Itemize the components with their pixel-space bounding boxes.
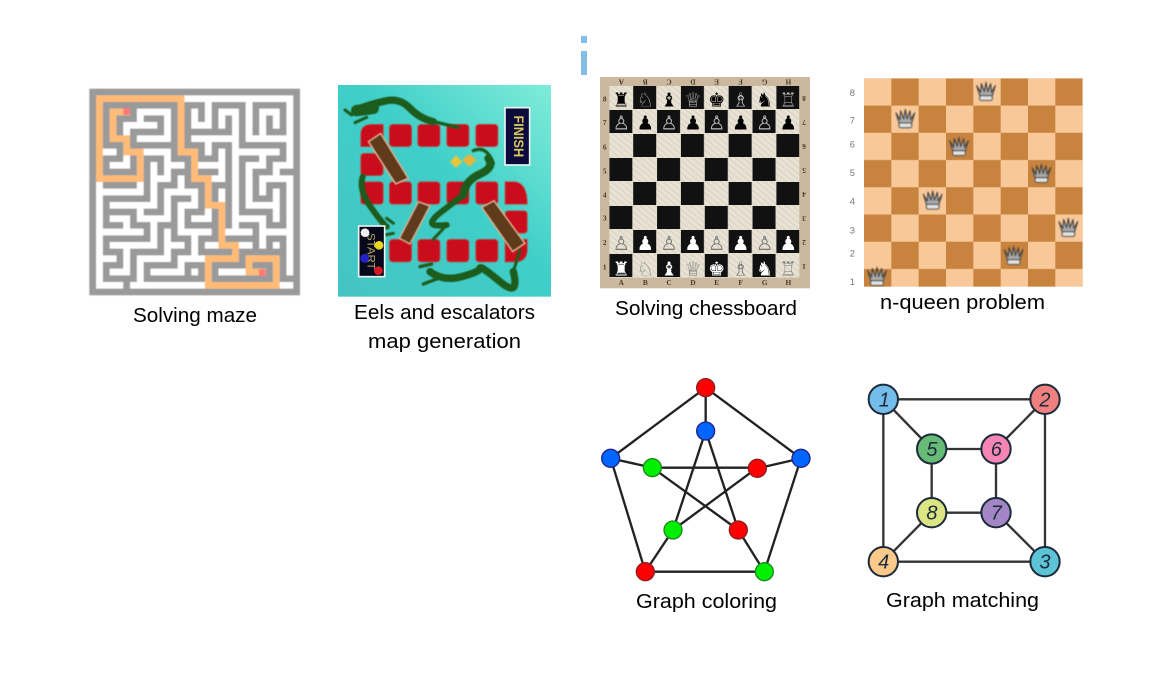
- file and rank labels: A: [618, 77, 624, 86]
- rank numbers: 6: [850, 139, 855, 149]
- file and rank labels: 7: [802, 118, 806, 127]
- eels: [345, 100, 520, 288]
- node numbers: 8: [926, 503, 938, 525]
- chess pieces: ♙: [756, 232, 773, 255]
- rank numbers: [850, 88, 855, 287]
- dice: [450, 154, 477, 168]
- chess pieces: ♝: [660, 88, 678, 111]
- file and rank labels: H: [785, 77, 791, 86]
- chess pieces: ♞: [756, 88, 773, 111]
- rank numbers: 5: [850, 168, 855, 178]
- file and rank labels: F: [738, 77, 743, 86]
- file and rank labels: 8: [802, 94, 806, 103]
- file and rank labels: 2: [603, 238, 607, 247]
- start box: [359, 226, 385, 277]
- node numbers: 1: [879, 389, 890, 411]
- file and rank labels: F: [738, 278, 743, 287]
- chess pieces: ♚: [708, 88, 725, 111]
- file and rank labels: 1: [603, 262, 607, 271]
- chess pieces: ♖: [780, 257, 797, 280]
- file and rank labels: 3: [802, 214, 806, 223]
- chess pieces: ♙: [756, 111, 773, 134]
- chess pieces: ♝: [660, 257, 678, 280]
- caption: Solving maze: [133, 305, 257, 327]
- panel: eels and escalators: [338, 85, 551, 353]
- chess pieces: [613, 88, 797, 280]
- escalators: [368, 133, 525, 252]
- chess pieces: ♟: [684, 232, 702, 255]
- maze walls: [93, 92, 297, 292]
- file and rank labels: 8: [603, 95, 607, 104]
- chess pieces: ♙: [613, 111, 630, 134]
- panel: graph matching: [869, 385, 1060, 612]
- rank numbers: 4: [850, 196, 855, 206]
- caption: Graph matching: [886, 590, 1039, 612]
- file and rank labels: B: [643, 278, 648, 287]
- node numbers: 7: [991, 503, 1003, 525]
- caption: Eels and escalators: [354, 302, 535, 324]
- file and rank labels: 6: [802, 142, 806, 151]
- chess pieces: ♙: [708, 111, 725, 134]
- caption: n-queen problem: [880, 292, 1045, 314]
- finish box: FINISH: [511, 115, 527, 157]
- chess board: [600, 77, 810, 288]
- file and rank labels: 4: [603, 190, 607, 199]
- chess pieces: ♞: [756, 257, 773, 280]
- file and rank labels: C: [666, 278, 672, 287]
- file and rank labels: G: [762, 278, 768, 287]
- chess pieces: ♕: [684, 257, 702, 280]
- rank numbers: 3: [850, 225, 855, 235]
- chess pieces: ♙: [660, 232, 678, 255]
- edges: [883, 399, 1045, 562]
- file and rank labels: C: [666, 77, 672, 86]
- rank numbers: 7: [850, 115, 855, 125]
- file and rank labels: G: [762, 77, 768, 86]
- node numbers: 5: [926, 439, 938, 461]
- icon: blue i mark: [581, 36, 587, 75]
- chess pieces: ♕: [684, 88, 702, 111]
- panel: solving chessboard: [600, 77, 810, 320]
- start marker: [123, 108, 130, 115]
- chess pieces: ♚: [708, 257, 725, 280]
- chess pieces: ♙: [613, 232, 630, 255]
- file and rank labels: D: [690, 77, 696, 86]
- panel: graph coloring: [602, 379, 810, 613]
- caption line 2: map generation: [368, 331, 521, 353]
- start box: START: [364, 233, 376, 270]
- board image: [338, 85, 551, 297]
- chess pieces: ♜: [613, 257, 630, 280]
- node numbers: 4: [878, 552, 889, 574]
- file and rank labels: 7: [603, 118, 607, 127]
- file and rank labels: 5: [802, 166, 806, 175]
- nodes: [602, 379, 810, 581]
- chess pieces: ♙: [708, 232, 725, 255]
- rank numbers: 1: [850, 277, 855, 287]
- file and rank labels: E: [714, 77, 719, 86]
- chess pieces: ♟: [780, 232, 797, 255]
- chess pieces: ♟: [637, 232, 654, 255]
- chess pieces: ♖: [780, 88, 797, 111]
- file and rank labels: D: [690, 278, 696, 287]
- nodes: [869, 385, 1060, 576]
- rank numbers: 2: [850, 249, 855, 259]
- file and rank labels: H: [785, 278, 791, 287]
- chess pieces: ♟: [637, 111, 654, 134]
- file and rank labels: A: [619, 278, 625, 287]
- node numbers: 6: [991, 439, 1003, 461]
- file and rank labels: [603, 77, 806, 287]
- file and rank labels: 3: [603, 214, 607, 223]
- rank numbers: 8: [850, 88, 855, 98]
- chess pieces: ♘: [637, 257, 654, 280]
- queen board: [850, 78, 1083, 287]
- solution path: [99, 99, 276, 285]
- node numbers: 2: [1038, 389, 1051, 411]
- finish box: [505, 108, 530, 165]
- red tiles: [361, 124, 527, 262]
- petersen graph: [602, 379, 810, 581]
- panel: solving maze: [87, 87, 302, 327]
- chess pieces: ♟: [732, 232, 749, 255]
- chess pieces: ♗: [732, 88, 749, 111]
- node numbers: [878, 389, 1051, 574]
- panel: n-queen problem: [850, 78, 1083, 314]
- file and rank labels: B: [643, 77, 648, 86]
- file and rank labels: 6: [603, 142, 607, 151]
- chess pieces: ♘: [637, 88, 654, 111]
- chess pieces: ♟: [780, 111, 797, 134]
- file and rank labels: 5: [603, 166, 607, 175]
- chess pieces: ♜: [613, 88, 630, 111]
- chess pieces: ♟: [732, 111, 749, 134]
- file and rank labels: 1: [802, 262, 806, 271]
- chess pieces: ♙: [660, 111, 678, 134]
- caption: Graph coloring: [636, 591, 777, 613]
- file and rank labels: E: [714, 278, 719, 287]
- caption: Solving chessboard: [615, 298, 797, 320]
- node numbers: 3: [1039, 552, 1051, 574]
- end marker: [259, 269, 266, 276]
- edges: [611, 388, 801, 572]
- chess pieces: ♗: [732, 257, 749, 280]
- file and rank labels: 4: [802, 190, 806, 199]
- cube graph: [869, 385, 1060, 576]
- queens: [868, 82, 1078, 285]
- chess pieces: ♟: [684, 111, 702, 134]
- file and rank labels: 2: [802, 238, 806, 247]
- maze image: [87, 87, 302, 297]
